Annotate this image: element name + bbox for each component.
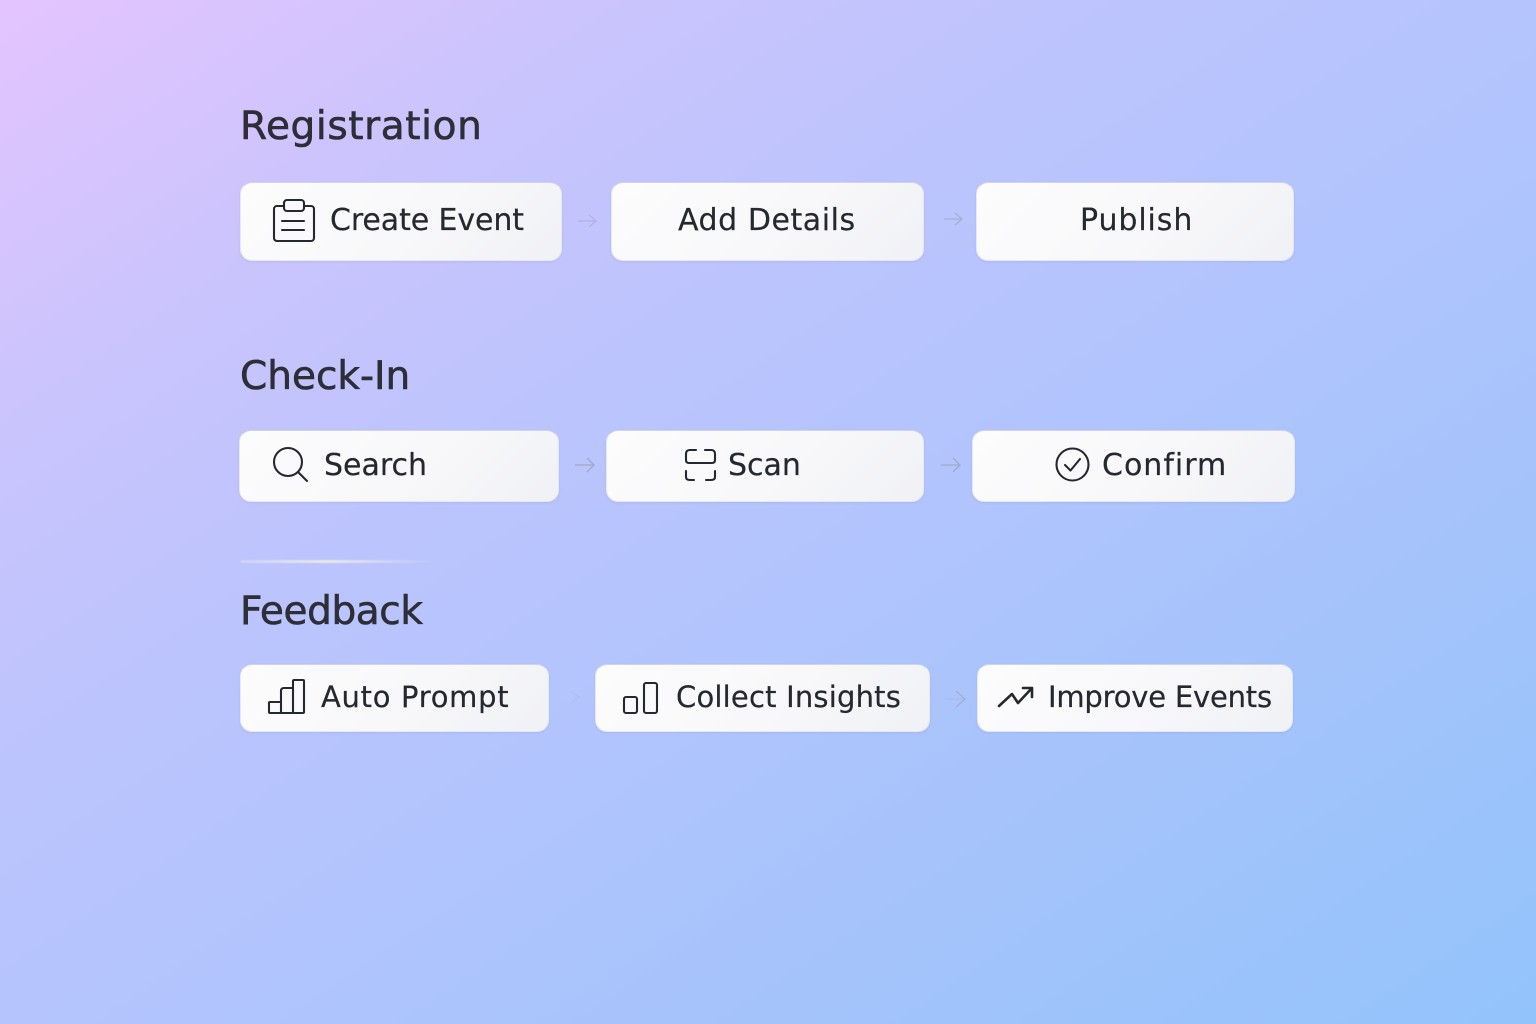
label: Scan: Scan xyxy=(728,448,801,483)
heading: Registration: Registration xyxy=(240,104,482,149)
icon: check circle xyxy=(1055,448,1090,482)
label: Auto Prompt: Auto Prompt xyxy=(321,680,509,714)
card: Auto Prompt xyxy=(240,664,549,732)
arrow: feedback faint xyxy=(572,692,580,702)
icon: two bars xyxy=(622,682,658,714)
card: Search xyxy=(239,430,559,502)
arrow: check-in 2 xyxy=(941,458,961,472)
label: Create Event: Create Event xyxy=(330,203,524,238)
icon: scan frame xyxy=(684,449,716,481)
arrow: check-in 1 xyxy=(575,458,595,472)
heading: Feedback: Feedback xyxy=(240,589,423,634)
icon: rising bars xyxy=(268,679,306,714)
card: Confirm xyxy=(972,430,1295,502)
label: Improve Events: Improve Events xyxy=(1048,680,1272,714)
icon: trend line xyxy=(998,686,1034,708)
divider: fading line xyxy=(240,560,437,563)
arrow: registration 1 xyxy=(578,214,597,228)
card: Improve Events xyxy=(977,664,1293,732)
label: Search: Search xyxy=(324,448,427,483)
label: Publish: Publish xyxy=(1080,203,1193,238)
label: Add Details: Add Details xyxy=(678,203,856,238)
card: Create Event xyxy=(240,182,562,261)
arrow: feedback chevron xyxy=(946,690,966,708)
icon: clipboard xyxy=(272,199,316,242)
card: Publish xyxy=(976,182,1294,261)
arrow: registration 2 xyxy=(944,212,963,226)
icon: magnifier xyxy=(272,447,308,482)
label: Confirm: Confirm xyxy=(1102,448,1227,483)
card: Add Details xyxy=(611,182,924,261)
card: Scan xyxy=(606,430,924,502)
heading: Check-In: Check-In xyxy=(240,354,410,399)
label: Collect Insights: Collect Insights xyxy=(676,680,901,714)
card: Collect Insights xyxy=(595,664,930,732)
